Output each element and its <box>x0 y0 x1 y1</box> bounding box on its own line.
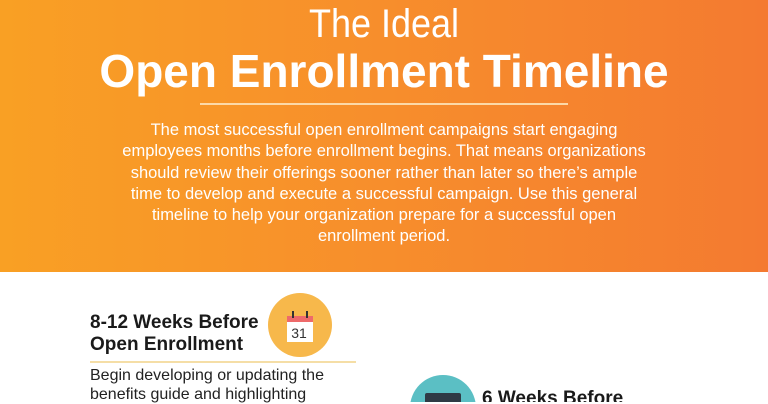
icon: calendar <box>268 293 332 357</box>
intro paragraph <box>122 121 646 245</box>
title underline <box>200 103 568 105</box>
intro paragraph: employees months before enrollment begins. That means organizations <box>122 142 646 160</box>
step body text: benefits guide and highlighting <box>90 386 306 403</box>
main title: Open Enrollment Timeline <box>99 45 669 97</box>
intro paragraph: should review their offerings sooner rather than later so there’s ample <box>131 164 637 182</box>
intro paragraph: time to develop and execute a successful campaign. Use this general <box>131 185 637 203</box>
icon: teal circle <box>410 375 476 402</box>
step heading: 8-12 weeks <box>90 312 259 355</box>
intro paragraph: enrollment period. <box>318 227 450 245</box>
step heading: 8-12 weeks: Open Enrollment <box>90 334 243 355</box>
header banner <box>0 0 768 272</box>
step body text: Begin developing or updating the <box>90 367 324 384</box>
divider under heading <box>90 361 356 363</box>
intro paragraph: The most successful open enrollment campaigns start engaging <box>151 121 617 139</box>
intro paragraph: timeline to help your organization prepare for a successful open <box>152 206 616 224</box>
title line 1: The Ideal <box>309 2 459 46</box>
icon: calendar: 31 <box>291 325 307 341</box>
step heading: 8-12 weeks: 8-12 Weeks Before <box>90 312 259 333</box>
step body text <box>90 367 324 403</box>
